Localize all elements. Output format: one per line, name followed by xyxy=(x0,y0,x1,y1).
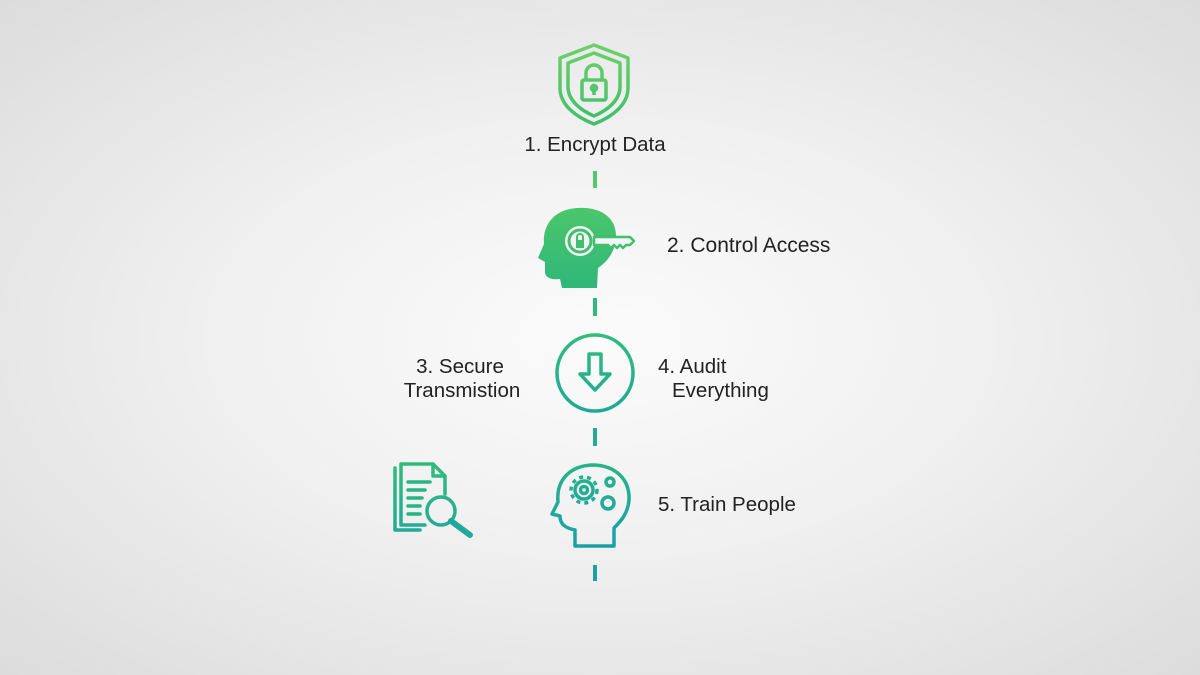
step 2 label: 2. Control Access xyxy=(667,234,830,257)
icon: document with magnifier xyxy=(395,464,470,535)
icon: download circle xyxy=(557,335,633,411)
connector dashes xyxy=(593,171,597,581)
step 5 label: 5. Train People xyxy=(658,493,796,516)
step 3 label: Transmistion xyxy=(404,379,520,402)
icon: shield with lock xyxy=(560,45,628,124)
step 4 label: 4. Audit xyxy=(658,355,727,378)
step 3 label: 3. Secure xyxy=(416,355,504,378)
icon: head with key xyxy=(538,208,634,288)
icon: head with gears xyxy=(552,465,629,546)
step 4 label: Everything xyxy=(672,379,769,402)
step 1 label: 1. Encrypt Data xyxy=(524,133,666,156)
